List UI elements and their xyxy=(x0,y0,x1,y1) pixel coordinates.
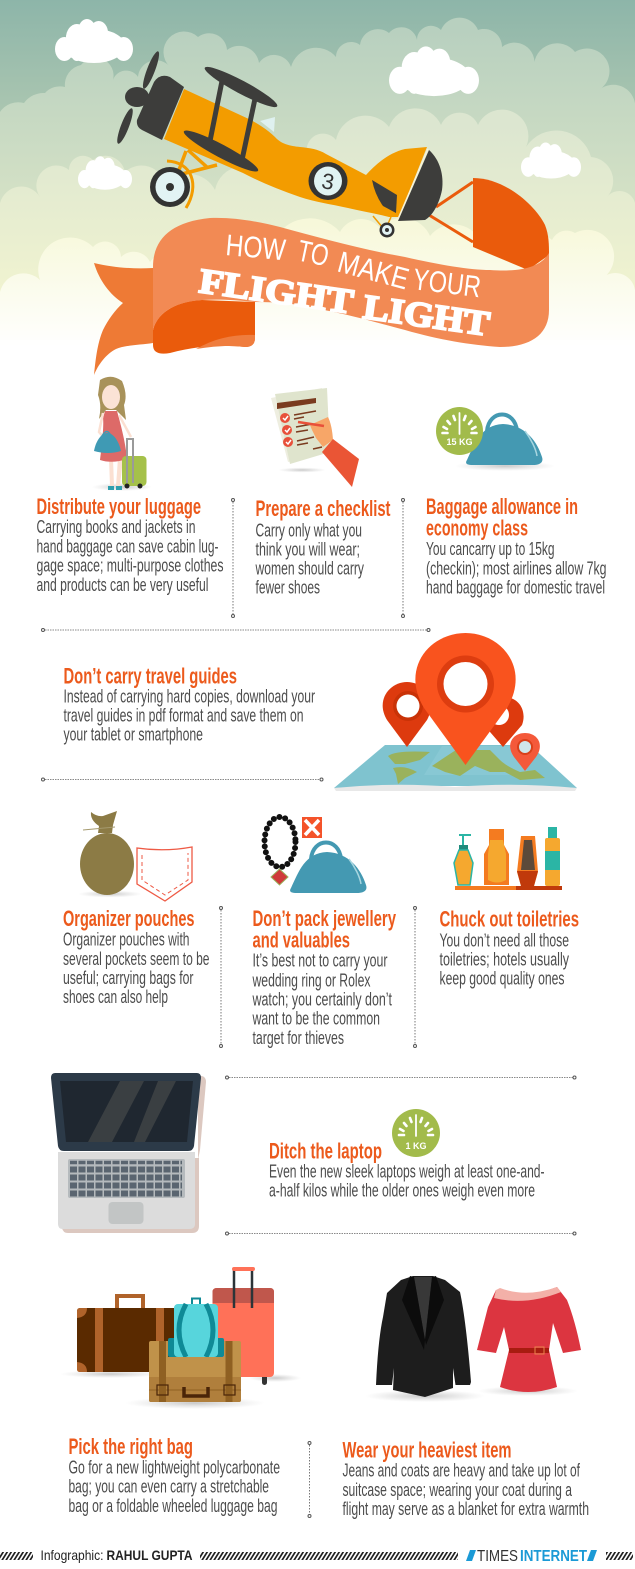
banner fold xyxy=(153,300,255,354)
credit: Infographic: xyxy=(40,1547,104,1563)
text: distribute your luggage: Carrying books and jackets in xyxy=(36,517,196,537)
number badge: 3 xyxy=(320,168,336,195)
title: MAKE xyxy=(334,246,412,296)
times internet logo: INTERNET xyxy=(520,1548,587,1565)
main pin xyxy=(415,633,516,765)
banner tow lines xyxy=(429,182,473,242)
horizontal divider xyxy=(226,1076,576,1079)
text: organizer pouches: Organizer pouches xyxy=(63,906,194,931)
text: jewellery: wedding ring or Rolex xyxy=(252,970,370,990)
text: baggage allowance: economy class xyxy=(426,516,528,540)
title: HOW xyxy=(224,229,288,267)
banner body xyxy=(153,218,549,347)
text: prepare a checklist: fewer shoes xyxy=(256,578,320,598)
text: distribute your luggage: Distribute your luggage xyxy=(36,494,201,519)
text: travel guides: travel guides in pdf format and save them on xyxy=(64,706,304,726)
windshield xyxy=(260,117,275,132)
text: jewellery: It’s best not to carry your xyxy=(252,950,388,970)
text: travel guides xyxy=(64,664,315,744)
back pins xyxy=(383,682,524,747)
text: toiletries: You don’t need all those xyxy=(440,930,569,950)
icon: toiletries shelf xyxy=(454,827,562,890)
horizontal divider xyxy=(226,1232,576,1235)
wheel xyxy=(150,167,190,207)
text: baggage allowance: You cancarry up to 15kg xyxy=(426,539,554,559)
text: jewellery: Don’t pack jewellery xyxy=(252,906,397,931)
text: toiletries: toiletries; hotels usually xyxy=(440,950,569,970)
text: jewellery xyxy=(252,906,397,1048)
brown suitcase xyxy=(77,1296,177,1372)
text: organizer pouches xyxy=(63,906,210,1007)
text: prepare a checklist xyxy=(255,496,391,598)
credit xyxy=(40,1547,192,1563)
text: organizer pouches: several pockets seem to be xyxy=(63,949,210,969)
vertical divider xyxy=(220,906,222,1048)
icon: red dress xyxy=(477,1287,581,1396)
title: FLIGHT xyxy=(197,261,356,321)
icon: 15 kg bag: 15 KG xyxy=(446,437,473,447)
icon: handbag xyxy=(290,842,366,893)
small pin xyxy=(510,733,540,771)
horizontal divider xyxy=(42,778,323,781)
number badge xyxy=(308,162,348,200)
sky background xyxy=(0,0,635,400)
times internet logo: TIMES xyxy=(477,1548,518,1565)
text: organizer pouches: Organizer pouches with xyxy=(63,930,190,950)
icon: crossed box xyxy=(302,817,322,838)
text: jewellery: want to be the common xyxy=(252,1008,380,1028)
text: organizer pouches: shoes can also help xyxy=(63,987,168,1007)
title: LIGHT xyxy=(361,287,492,344)
vertical divider xyxy=(402,498,404,618)
icon: necklace xyxy=(264,817,296,885)
rudder edge xyxy=(398,149,428,219)
vertical divider xyxy=(232,498,234,618)
cloud mid right xyxy=(521,142,581,179)
bottle 4 xyxy=(545,827,560,886)
cloud top left xyxy=(55,19,133,63)
text: travel guides: your tablet or smartphone xyxy=(64,724,203,744)
text: baggage allowance xyxy=(426,494,606,598)
text: ditch the laptop xyxy=(269,1138,544,1200)
vertical divider xyxy=(308,1442,311,1518)
icon: black blazer xyxy=(365,1276,485,1402)
biplane xyxy=(114,50,442,237)
icon: 1 kg gauge xyxy=(392,1109,440,1157)
icon: woman with luggage xyxy=(92,377,152,491)
teal backpack xyxy=(168,1298,224,1357)
text: jewellery: and valuables xyxy=(252,928,350,952)
footer xyxy=(0,1547,633,1565)
red trolley xyxy=(212,1267,274,1385)
title: YOUR xyxy=(411,263,483,304)
title xyxy=(197,229,492,344)
banner xyxy=(94,178,549,375)
text: distribute your luggage xyxy=(36,494,224,595)
cloud mid left xyxy=(78,156,132,190)
text: pick the right bag: Pick the right bag xyxy=(68,1434,193,1459)
text: toiletries xyxy=(440,906,579,988)
banner tail xyxy=(94,263,153,375)
text: toiletries: keep good quality ones xyxy=(440,968,564,988)
text: prepare a checklist: Prepare a checklist xyxy=(256,496,391,521)
fuselage xyxy=(164,89,427,217)
rear wheel xyxy=(373,216,394,238)
icon: 1 kg gauge: 1 KG xyxy=(405,1141,427,1151)
text: pick the right bag: bag or a foldable wheeled luggage bag xyxy=(68,1496,278,1516)
icon: pocket xyxy=(137,847,192,901)
bottle 2 xyxy=(484,829,509,885)
icon: laptop xyxy=(51,1073,206,1233)
text: distribute your luggage: hand baggage can save cabin lug- xyxy=(36,536,218,556)
credit: RAHUL GUPTA xyxy=(106,1547,192,1563)
text: travel guides: Instead of carrying hard copies, download your xyxy=(64,686,315,706)
text: travel guides: Don’t carry travel guides xyxy=(64,664,237,688)
map with location pins xyxy=(334,633,577,791)
text: wear your heaviest item: Wear your heaviest item xyxy=(342,1438,512,1462)
text: ditch the laptop: Ditch the laptop xyxy=(269,1138,382,1164)
bottle 1 xyxy=(454,835,473,885)
banner end xyxy=(473,178,549,270)
text: distribute your luggage: and products can be very useful xyxy=(36,575,208,595)
cloud top right xyxy=(389,46,479,96)
vertical divider xyxy=(414,906,416,1048)
rudder xyxy=(398,150,442,221)
title: TO xyxy=(295,235,332,273)
icon: luggage group xyxy=(60,1267,301,1409)
icon: checklist xyxy=(271,388,359,487)
times internet logo xyxy=(466,1548,597,1565)
icon: sack xyxy=(78,811,142,898)
cowling xyxy=(137,76,184,140)
tail fin xyxy=(372,180,397,213)
text: prepare a checklist: think you will wear; xyxy=(256,540,360,560)
bottle 3 xyxy=(517,836,538,886)
text: jewellery: target for thieves xyxy=(252,1028,344,1048)
text: distribute your luggage: gage space; multi-purpose clothes xyxy=(36,556,224,576)
text: pick the right bag: bag; you can even carry a stretchable xyxy=(68,1476,269,1496)
text: prepare a checklist: women should carry xyxy=(255,558,364,578)
text: pick the right bag xyxy=(68,1434,280,1516)
map xyxy=(334,745,577,791)
horizontal divider xyxy=(42,628,430,632)
text: wear your heaviest item xyxy=(342,1438,589,1519)
text: pick the right bag: Go for a new lightweight polycarbonate xyxy=(68,1458,280,1478)
icon: 15 kg bag xyxy=(436,407,555,471)
text: jewellery: watch; you certainly don’t xyxy=(252,990,392,1010)
text: prepare a checklist: Carry only what you xyxy=(256,520,362,540)
text: organizer pouches: useful; carrying bags for xyxy=(63,968,194,988)
landing gear xyxy=(167,150,217,208)
wings and struts xyxy=(181,62,280,176)
propeller xyxy=(114,50,162,145)
tan case xyxy=(149,1341,241,1402)
